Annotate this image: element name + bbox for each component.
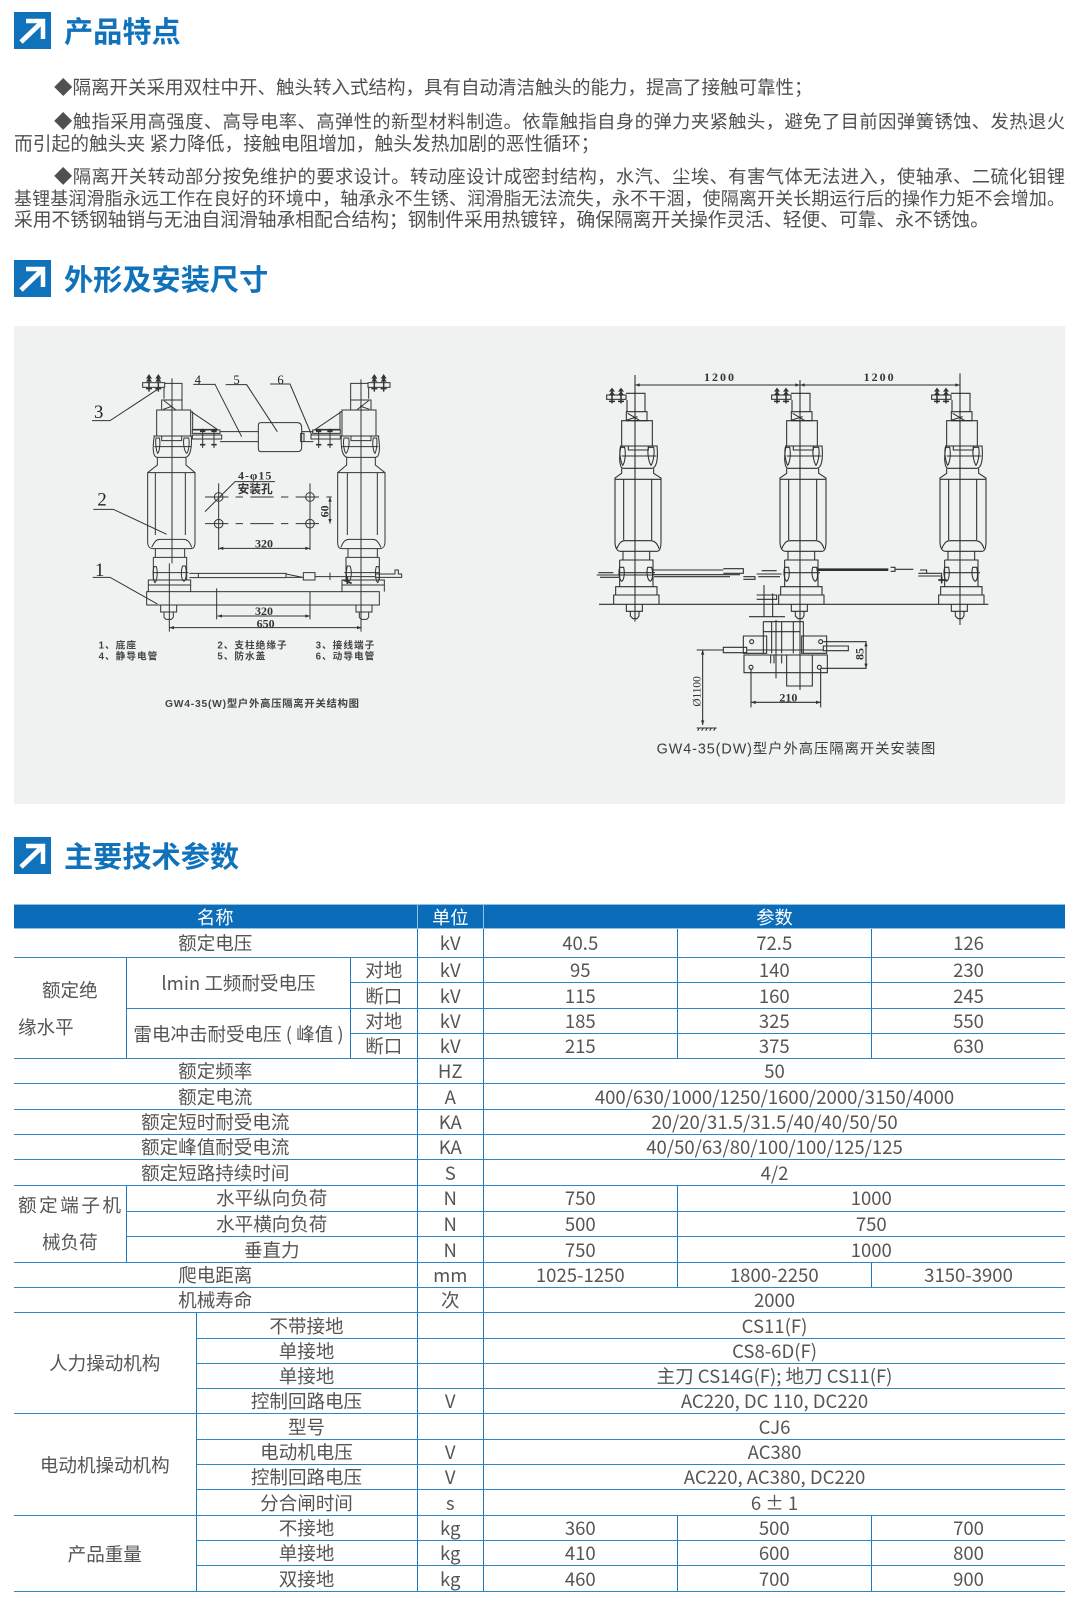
poles <box>143 374 390 619</box>
table header <box>14 904 1065 928</box>
callout numbers: 5 <box>233 373 240 387</box>
lines and mechanism <box>597 373 988 731</box>
row: rated frequency <box>178 1058 785 1084</box>
rows: terminal mechanical load <box>18 1186 892 1255</box>
dimension labels: 320 <box>255 536 273 550</box>
text block: product features <box>14 74 1065 232</box>
text block: product features: ◆隔离开关转动部分按免维护的要求设计。转动座设计成密封结构，水汽、尘埃、有害气体无法进入，使轴承、二硫化钼锂 <box>54 163 1065 189</box>
dimension labels: 1200 <box>704 370 736 384</box>
callout numbers: 6 <box>277 373 284 387</box>
chart: installation drawing GW4-35(DW) <box>597 370 988 758</box>
dimension labels: 4-φ15 <box>238 468 271 482</box>
text block: product features: 基锂基润滑脂永远工作在良好的环境中，轴承永不生锈、润滑脂无法流失，永不干涸，使隔离开关长期运行后的操作力矩不会增加。 <box>14 185 1065 211</box>
row: rated voltage: kV <box>440 929 461 956</box>
dimension labels: 60 <box>318 505 332 517</box>
icon: arrow square <box>14 12 51 49</box>
table: technical parameters: 缘水平 <box>18 1013 74 1040</box>
table: technical parameters <box>14 904 1065 1592</box>
dimension arrowheads <box>635 383 960 725</box>
rows: insulation level: lmin 工频耐受电压 <box>161 969 316 996</box>
row: rated voltage: 126 <box>953 929 984 956</box>
dimension labels: 210 <box>779 690 797 704</box>
table: technical parameters: 电动机操动机构 <box>40 1450 170 1478</box>
row: rated voltage <box>178 929 984 956</box>
text block: product features: ◆隔离开关采用双柱中开、触头转入式结构，具有自动清洁触头的能力，提高了接触可靠性； <box>54 74 813 100</box>
parts legend: 4、静导电管 <box>99 651 158 663</box>
table: technical parameters: 产品重量 <box>68 1540 142 1566</box>
heading: 产品特点: 产品特点 <box>64 9 181 51</box>
table: technical parameters: 械负荷 <box>42 1228 98 1255</box>
parts legend: 2、支柱绝缘子 <box>217 639 288 651</box>
text block: product features: 采用不锈钢轴销与无油自润滑轴承相配合结构；钢制件采用热镀锌，确保隔离开关操作灵活、轻便、可靠、永不锈蚀。 <box>14 205 989 232</box>
row: creepage distance <box>178 1262 1013 1288</box>
callout numbers <box>94 373 284 581</box>
three poles <box>607 388 986 619</box>
heading: 主要技术参数: 主要技术参数 <box>64 834 239 876</box>
parts legend <box>99 639 375 663</box>
base, rods and dims <box>92 378 402 632</box>
row: peak withstand current <box>141 1134 903 1160</box>
text block: product features: 而引起的触头夹 紧力降低，接触电阻增加，触头发热加剧的恶性循环； <box>14 129 599 156</box>
parts legend: 6、动导电管 <box>316 651 375 663</box>
caption left: GW4-35(W)型户外高压隔离开关结构图 <box>165 697 359 710</box>
dimension labels: 85 <box>852 648 866 660</box>
row: mechanical life <box>178 1288 795 1312</box>
row: rated voltage: 额定电压 <box>178 929 252 956</box>
dimension labels: 650 <box>257 616 275 630</box>
callout numbers: 3 <box>94 402 103 423</box>
dimension labels: 安装孔 <box>238 480 273 497</box>
table: technical parameters: 雷电冲击耐受电压 ( 峰值 ) <box>133 1020 344 1046</box>
row: short-circuit duration <box>141 1160 788 1186</box>
callout numbers: 2 <box>97 489 107 510</box>
row: rated voltage: 40.5 <box>562 929 598 956</box>
icon: arrow square <box>14 260 51 297</box>
parts legend: 5、防水盖 <box>217 651 266 663</box>
row: rated voltage: 72.5 <box>756 929 792 956</box>
text block: product features: ◆触指采用高强度、高导电率、高弹性的新型材料制造。依靠触指自身的弹力夹紧触头，避免了目前因弹簧锈蚀、发热退火 <box>54 108 1065 134</box>
caption right: GW4-35(DW)型户外高压隔离开关安装图 <box>657 741 935 758</box>
table: technical parameters: 额定绝 <box>42 976 98 1003</box>
dimension arrowheads <box>169 497 362 629</box>
dimension labels: 320 <box>255 604 273 618</box>
callout numbers: 1 <box>95 560 104 581</box>
dimension labels <box>238 468 332 630</box>
chart: structure drawing GW4-35(W) <box>92 370 988 758</box>
row: short-time withstand current <box>141 1110 898 1134</box>
rows: terminal mechanical load: 额定端子机 <box>18 1191 124 1218</box>
rows: insulation level <box>18 958 984 1040</box>
table: technical parameters: 人力操动机构 <box>49 1349 160 1376</box>
dimension labels: Ø1100 <box>692 676 704 707</box>
callout numbers: 4 <box>195 373 202 387</box>
dimension labels <box>692 370 896 707</box>
panel: drawings <box>14 326 1065 804</box>
rows: product weight <box>68 1516 984 1566</box>
parts legend: 1、底座 <box>99 639 137 651</box>
rows: motor operating mechanism <box>40 1414 790 1478</box>
icon: arrow square <box>14 837 51 874</box>
row: rated current <box>178 1084 954 1110</box>
heading: 外形及安装尺寸: 外形及安装尺寸 <box>64 257 268 299</box>
parts legend: 3、接线端子 <box>316 639 375 651</box>
dimension labels: 1200 <box>864 370 896 384</box>
rows: manual operating mechanism <box>49 1312 807 1376</box>
